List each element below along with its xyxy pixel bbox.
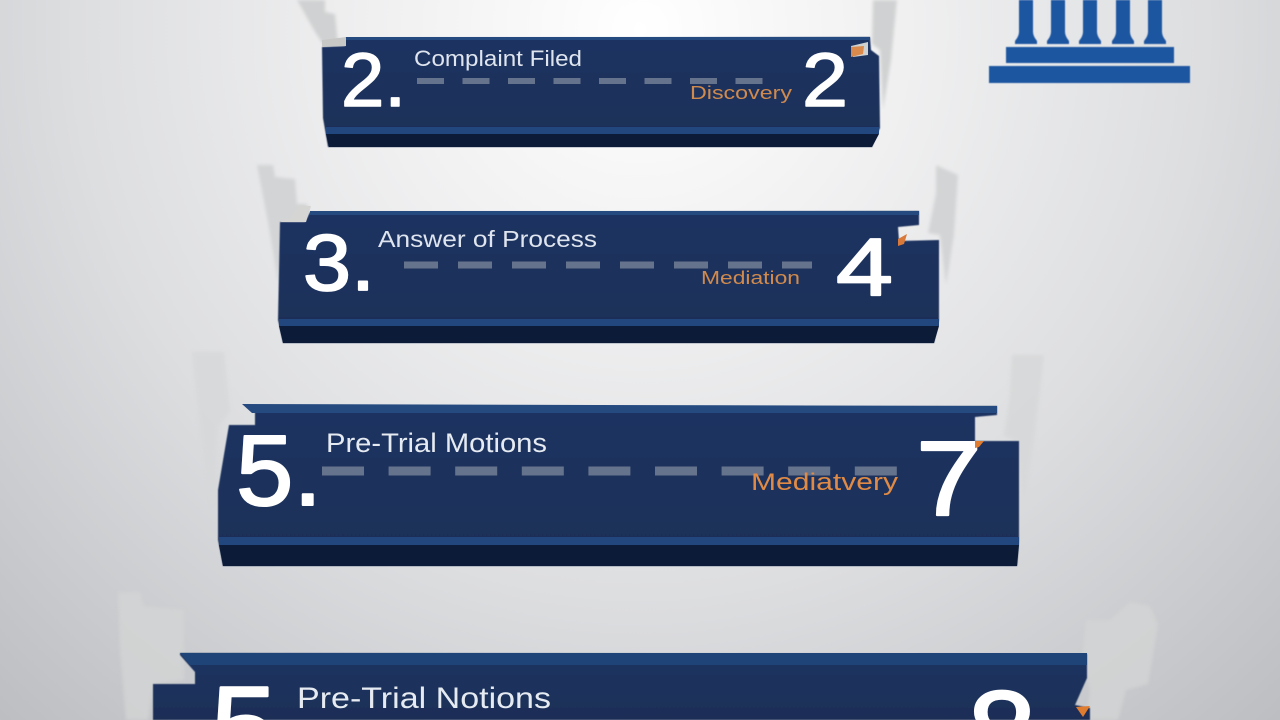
orange corner, step 5 <box>975 441 984 448</box>
step label: answer of process: Answer of Process <box>378 226 597 252</box>
panel body, step 5 <box>218 406 1019 566</box>
numeral 2 right: 2 <box>802 38 848 123</box>
decorative torn paper edges, step 2 <box>297 0 897 110</box>
numeral 3: 3. <box>303 218 375 307</box>
torn corners, step 2 <box>322 37 346 47</box>
numeral 2: 2. <box>341 38 406 123</box>
panel body, step 3 <box>278 211 939 343</box>
panel body, step 6 <box>153 653 1090 720</box>
step label: discovery: Discovery <box>690 83 792 103</box>
numeral 4: 4 <box>836 222 893 313</box>
decorative torn paper edges, step 6 <box>118 592 1158 720</box>
step label: pre-trial motions: Pre-Trial Motions <box>326 428 547 458</box>
torn corners, step 3 <box>280 205 311 222</box>
dashed connector <box>322 466 913 476</box>
panel: step 6 pre-trial motions, cropped by the bottom edge <box>118 592 1158 720</box>
dashed connector <box>417 78 770 84</box>
panel: step 2 complaint and discovery <box>297 0 897 147</box>
decorative torn paper edges, step 5 <box>192 352 1044 506</box>
decorative torn paper edges, step 3 <box>257 165 958 285</box>
icon: courthouse columns <box>989 0 1190 83</box>
panel: step 3 answer and mediation <box>257 165 958 343</box>
panel: step 5 pre-trial motions and mediation <box>192 352 1044 566</box>
step label: pre-trial motions: Pre-Trial Notions <box>297 682 551 715</box>
dashed connector <box>404 262 812 268</box>
panel body, step 2 <box>322 37 880 147</box>
orange corner, step 6 <box>1076 706 1090 717</box>
step label: complaint filed: Complaint Filed <box>414 46 582 71</box>
step label: mediation: Mediation <box>701 268 800 288</box>
numeral 5: 5. <box>236 415 322 527</box>
numeral 7: 7 <box>916 420 982 538</box>
step label: mediation / delivery: Mediatvery <box>751 469 898 496</box>
